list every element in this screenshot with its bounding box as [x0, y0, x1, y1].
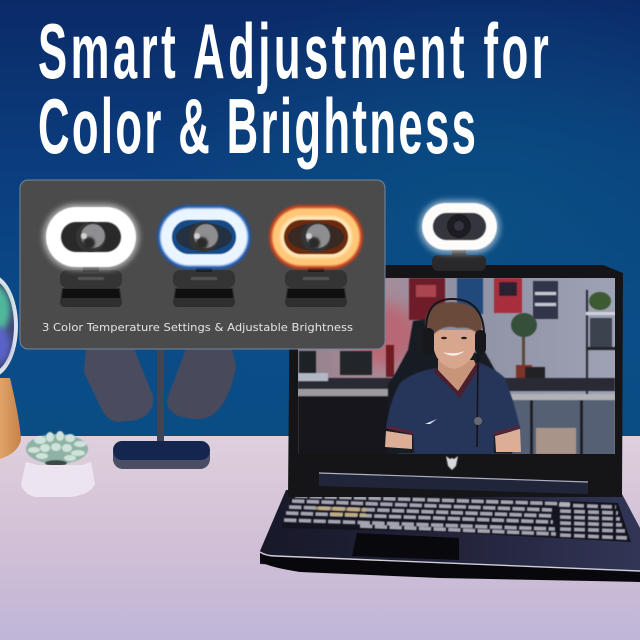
panel background	[20, 180, 385, 349]
front edge highlight	[260, 552, 640, 582]
background wall	[0, 0, 640, 445]
eyes	[441, 337, 467, 339]
stand pole	[157, 349, 164, 448]
ring light glow	[419, 200, 500, 254]
title line 2: Color & Brightness	[38, 84, 476, 170]
number pad keys	[559, 505, 628, 538]
headphones	[423, 299, 486, 356]
potted plant	[511, 313, 545, 381]
headphone stand	[84, 349, 236, 469]
neck	[438, 360, 476, 392]
title line 1: Smart Adjustment for	[38, 9, 549, 95]
hair	[425, 302, 482, 336]
desk surface	[0, 436, 640, 640]
sleeve trim	[387, 427, 520, 434]
laptop	[260, 265, 640, 582]
RGB lamp	[0, 274, 21, 459]
succulent plant	[21, 431, 95, 497]
gaming chair	[388, 318, 512, 454]
forearms	[385, 429, 521, 452]
webcam clip	[432, 250, 486, 271]
screen photo	[298, 278, 616, 456]
smile	[443, 351, 465, 356]
face	[433, 330, 476, 369]
title	[38, 9, 549, 170]
person	[385, 299, 521, 455]
shirt logos	[425, 417, 482, 425]
faceted white pot	[21, 462, 95, 497]
webcam: cool blue	[157, 205, 251, 307]
laptop-mounted webcam with white ring light	[419, 200, 500, 271]
brand logo	[446, 456, 458, 470]
red glow	[350, 303, 420, 367]
webcam: daylight white	[43, 204, 139, 307]
posters	[409, 278, 558, 320]
collar	[433, 362, 481, 398]
mic cable	[477, 354, 478, 447]
right ear cup	[167, 349, 236, 419]
back monitors and items	[299, 345, 394, 377]
camera body	[433, 213, 486, 240]
desk in photo	[298, 373, 615, 456]
color temperature panel	[20, 180, 385, 349]
succulent leaves	[26, 431, 88, 466]
keyboard	[282, 491, 631, 542]
ring light	[422, 203, 497, 250]
left ear cup	[84, 349, 153, 422]
accent keys	[316, 508, 366, 515]
key rows	[284, 496, 570, 534]
room wall	[298, 278, 615, 454]
hinge bar	[319, 473, 588, 494]
lamp wooden base	[0, 378, 21, 459]
laptop lid	[288, 265, 623, 497]
panel caption: 3 Color Temperature Settings & Adjustable Brightness	[42, 321, 353, 334]
shelf	[585, 289, 615, 395]
torso in navy shirt	[386, 362, 520, 455]
trackpad	[352, 533, 459, 560]
lamp light disc	[0, 274, 18, 378]
laptop base deck	[260, 490, 640, 582]
webcam: warm orange	[269, 205, 363, 307]
stand base	[113, 441, 210, 469]
